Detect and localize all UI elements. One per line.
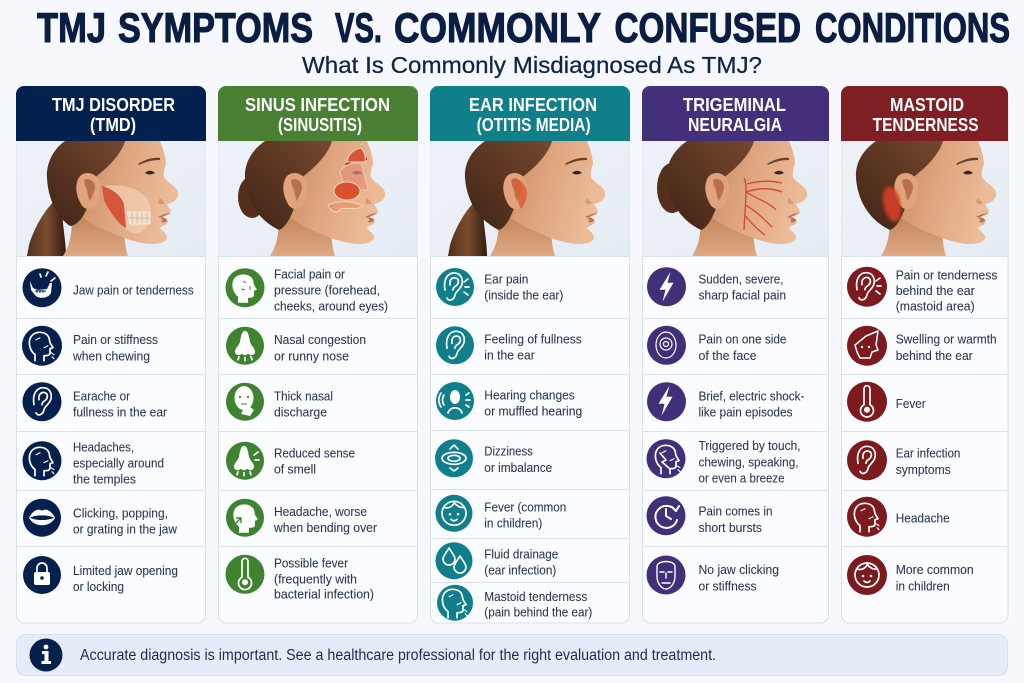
portrait with inflamed ear xyxy=(430,141,630,256)
header: NEURALGIA xyxy=(688,115,782,135)
symptom: limited opening lock: or locking xyxy=(73,579,124,594)
symptom: fever in children xyxy=(436,495,566,532)
header: SINUS INFECTION xyxy=(245,95,390,115)
symptom: headache xyxy=(847,497,950,537)
header: TMJ DISORDER xyxy=(52,95,175,115)
symptom: short bursts clock: short bursts xyxy=(698,520,762,535)
symptom: mastoid tenderness: Mastoid tenderness xyxy=(484,589,588,604)
symptom: one side of face: of the face xyxy=(698,348,756,363)
header xyxy=(218,86,418,141)
symptom: headaches: Headaches, xyxy=(73,439,134,454)
symptom: reduced smell: Reduced sense xyxy=(274,445,355,460)
symptom: possible fever xyxy=(226,555,374,601)
symptom: swelling: behind the ear xyxy=(896,348,973,363)
symptom: facial pain: cheeks, around eyes) xyxy=(274,298,388,313)
symptom: behind ear pain xyxy=(847,267,998,314)
footer callout xyxy=(16,634,1008,676)
symptom: headache bending: Headache, worse xyxy=(274,504,367,519)
footer text: Accurate diagnosis is important. See a healthcare professional for the right evaluation and treatment. xyxy=(80,647,716,664)
title: CONFUSED xyxy=(614,4,801,51)
symptom: limited opening lock: Limited jaw opening xyxy=(73,563,178,578)
title: SYMPTOMS xyxy=(118,4,313,51)
symptom: jaw pain: Jaw pain or tenderness xyxy=(73,282,194,297)
symptom: earache: Earache or xyxy=(73,389,131,404)
symptom: mastoid tenderness: (pain behind the ear) xyxy=(484,605,592,620)
header: (SINUSITIS) xyxy=(278,115,362,135)
panel: TMJ disorder xyxy=(16,86,206,623)
symptom: sudden pain: sharp facial pain xyxy=(698,287,786,302)
symptom: ear infection: symptoms xyxy=(896,462,951,477)
symptom: one side of face xyxy=(647,326,786,365)
symptom: dizziness xyxy=(435,439,552,477)
symptom: hearing changes: Hearing changes xyxy=(484,387,575,402)
symptom: mastoid tenderness xyxy=(437,585,592,621)
symptom: chewing stiffness: when chewing xyxy=(72,349,150,364)
portrait with sinus overlay xyxy=(218,141,418,256)
symptom: hearing changes: or muffled hearing xyxy=(484,404,582,419)
symptom: behind ear pain: Pain or tenderness xyxy=(896,267,998,282)
symptom: behind ear pain: behind the ear xyxy=(896,283,975,298)
symptom: facial pain: Facial pain or xyxy=(274,267,346,282)
symptom: earache: fullness in the ear xyxy=(73,405,168,420)
header: TENDERNESS xyxy=(873,115,979,135)
symptom: triggered by touch: chewing, speaking, xyxy=(698,455,798,470)
symptom: ear infection: Ear infection xyxy=(896,445,960,460)
symptom: swelling: Swelling or warmth xyxy=(896,332,997,347)
symptom: possible fever: Possible fever xyxy=(274,556,349,571)
symptom: jaw pain xyxy=(22,268,194,307)
symptom: fluid drainage: Fluid drainage xyxy=(484,546,558,561)
header xyxy=(16,86,206,141)
title: COMMONLY xyxy=(394,4,601,51)
symptom: fluid drainage: (ear infection) xyxy=(484,563,556,578)
symptom: headache: Headache xyxy=(896,511,950,526)
symptom: swelling xyxy=(847,326,997,366)
symptom: triggered by touch: Triggered by touch, xyxy=(698,438,800,453)
symptom: ear pain xyxy=(436,268,563,306)
symptom: triggered by touch xyxy=(646,438,800,486)
header: (OTITIS MEDIA) xyxy=(477,115,591,135)
symptom: discharge xyxy=(226,383,333,421)
symptom: hearing changes xyxy=(436,382,582,420)
symptom: discharge: Thick nasal xyxy=(274,389,333,404)
header xyxy=(642,86,829,141)
symptom: headache bending: when bending over xyxy=(273,520,378,535)
symptom: no jaw clicking xyxy=(646,556,779,594)
icon: info xyxy=(30,638,62,672)
symptom: ear pain: (inside the ear) xyxy=(484,287,563,302)
symptom: headaches: the temples xyxy=(73,471,136,486)
symptom: dizziness: or imbalance xyxy=(484,460,552,475)
panel: mastoid tenderness xyxy=(841,86,1008,623)
title: TMJ xyxy=(37,4,106,51)
symptom: children xyxy=(847,555,974,595)
symptom: nasal congestion: Nasal congestion xyxy=(274,332,366,347)
symptom: possible fever: bacterial infection) xyxy=(274,586,374,601)
symptom: electric shock xyxy=(647,382,804,421)
symptom: fever: Fever xyxy=(896,396,926,411)
header xyxy=(430,86,630,141)
symptom: sudden pain: Sudden, severe, xyxy=(698,271,784,286)
symptom: electric shock: like pain episodes xyxy=(698,405,793,420)
symptom: ear pain: Ear pain xyxy=(484,271,528,286)
portrait with jaw overlay xyxy=(16,141,206,256)
symptom: limited opening lock xyxy=(23,556,178,594)
panel: trigeminal neuralgia xyxy=(642,86,829,623)
symptom: short bursts clock: Pain comes in xyxy=(698,503,772,518)
symptom: fullness: in the ear xyxy=(484,348,535,363)
symptom: chewing stiffness xyxy=(22,326,158,366)
symptom: behind ear pain: (mastoid area) xyxy=(896,299,975,314)
symptom: facial pain: pressure (forehead, xyxy=(274,282,380,297)
symptom: reduced smell xyxy=(226,442,355,480)
symptom: fullness: Feeling of fullness xyxy=(484,331,582,346)
symptom: no jaw clicking: or stiffness xyxy=(698,578,757,593)
symptom: no jaw clicking: No jaw clicking xyxy=(698,562,779,577)
symptom: facial pain xyxy=(226,267,388,313)
symptom: one side of face: Pain on one side xyxy=(698,332,786,347)
header: EAR INFECTION xyxy=(469,95,597,115)
symptom: clicking lips: Clicking, popping, xyxy=(73,505,168,520)
symptom: fullness xyxy=(436,326,582,364)
portrait with mastoid highlight xyxy=(842,141,1008,256)
panel: ear infection xyxy=(430,86,630,623)
symptom: clicking lips: or grating in the jaw xyxy=(73,521,178,536)
symptom: headache bending xyxy=(226,499,378,537)
symptom: fever in children: in children) xyxy=(484,516,542,531)
symptom: electric shock: Brief, electric shock- xyxy=(698,389,804,404)
symptom: children: More common xyxy=(896,562,974,577)
symptom: nasal congestion xyxy=(226,327,366,365)
symptom: dizziness: Dizziness xyxy=(484,444,533,459)
symptom: possible fever: (frequently with xyxy=(274,571,357,586)
symptom: headaches: especially around xyxy=(73,455,164,470)
title xyxy=(37,4,1010,51)
symptom: reduced smell: of smell xyxy=(274,461,316,476)
symptom: ear infection xyxy=(847,440,960,480)
symptom: chewing stiffness: Pain or stiffness xyxy=(73,332,158,347)
panel: sinus infection xyxy=(218,86,418,623)
symptom: fever in children: Fever (common xyxy=(484,500,566,515)
title: VS. xyxy=(335,4,382,51)
symptom: headaches xyxy=(22,439,164,486)
symptom: short bursts clock xyxy=(646,496,772,535)
symptom: sudden pain xyxy=(647,267,786,306)
header: (TMD) xyxy=(90,115,136,135)
symptom: fluid drainage xyxy=(436,542,558,579)
symptom: triggered by touch: or even a breeze xyxy=(698,471,784,486)
symptom: nasal congestion: or runny nose xyxy=(274,349,349,364)
header: MASTOID xyxy=(890,95,964,115)
symptom: fever xyxy=(847,382,926,422)
portrait with nerve overlay xyxy=(642,141,828,256)
symptom: clicking lips xyxy=(23,499,178,537)
header: TRIGEMINAL xyxy=(683,95,786,115)
symptom: earache xyxy=(22,382,168,421)
subtitle: What Is Commonly Misdiagnosed As TMJ? xyxy=(302,52,762,78)
symptom: discharge: discharge xyxy=(274,405,327,420)
symptom: children: in children xyxy=(896,578,950,593)
header xyxy=(841,86,1008,141)
